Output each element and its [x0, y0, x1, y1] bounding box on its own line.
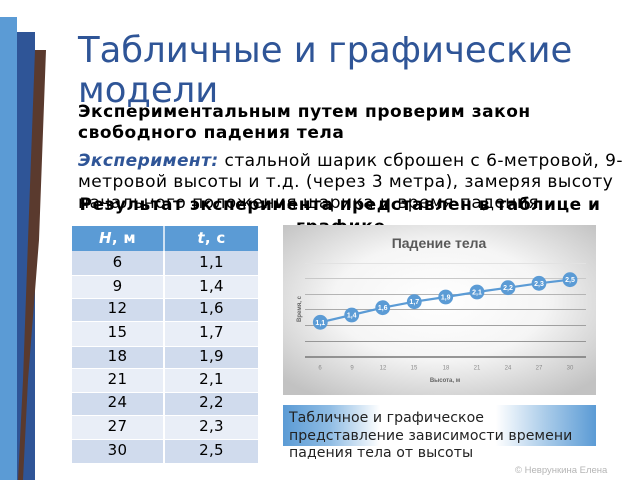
caption text: Табличное и графическое: [289, 410, 484, 426]
line chart: falling body: [283, 225, 596, 395]
title: Табличные и графические: [78, 30, 572, 71]
x axis labels: [318, 366, 574, 372]
data labels: 1,6: [378, 305, 388, 312]
table header: H, t: H, м: [99, 229, 136, 247]
table rows: 1,9: [199, 347, 224, 365]
data labels: 2,1: [472, 290, 482, 296]
x axis labels: 18: [443, 366, 450, 372]
table rows: 1,6: [199, 299, 224, 317]
table rows: 1,4: [199, 277, 224, 295]
caption text: представление зависимости времени: [289, 428, 572, 444]
intro text: свободного падения тела: [78, 123, 344, 143]
caption text: [288, 410, 572, 461]
table rows: 2,1: [199, 370, 224, 388]
caption: [283, 405, 596, 461]
grid lines: [305, 264, 586, 357]
caption text: падения тела от высоты: [289, 445, 473, 461]
data labels: 1,7: [409, 299, 419, 306]
x axis title: Высота, м: [430, 378, 461, 384]
table rows: 6: [113, 253, 122, 271]
experiment description: [78, 151, 623, 213]
x axis labels: 21: [474, 366, 481, 372]
x axis labels: 24: [505, 366, 512, 372]
intro text: [78, 102, 531, 143]
table rows: 15: [108, 323, 127, 341]
x axis labels: 6: [318, 366, 322, 372]
result heading: [80, 195, 600, 237]
data points: [313, 272, 577, 330]
intro text: Экспериментальным путем проверим закон: [78, 102, 531, 122]
data labels: 2,2: [503, 285, 513, 292]
table rows: 2,3: [199, 417, 224, 435]
decorative side stripes: [0, 17, 46, 480]
x axis labels: 27: [536, 366, 543, 372]
table rows: 2,5: [199, 441, 224, 459]
table header: H, t: t, с: [197, 229, 226, 247]
title: модели: [78, 70, 218, 111]
table rows: 27: [108, 417, 127, 435]
table rows: 21: [108, 370, 127, 388]
table header: H, t: [72, 226, 258, 251]
table rows: 1,7: [199, 323, 224, 341]
data labels: [315, 277, 575, 327]
table rows: 9: [113, 277, 122, 295]
experiment description: Эксперимент: стальной шарик сброшен с 6-метровой, 9-: [78, 151, 623, 171]
watermark: © Неврункина Елена: [515, 465, 607, 476]
chart title: Падение тела: [392, 235, 486, 251]
result heading: графике: [296, 217, 386, 237]
result heading: Результат эксперимента представлен в таблице и: [80, 195, 600, 215]
table rows: 1,1: [199, 253, 224, 271]
table rows: 2,2: [199, 393, 224, 411]
x axis labels: 30: [567, 366, 574, 372]
table rows: [72, 251, 258, 463]
table rows: 18: [108, 347, 127, 365]
table rows: 24: [108, 393, 127, 411]
experiment description: начального положения шарика и время падения: [78, 193, 539, 213]
data labels: 2,5: [565, 277, 575, 284]
data labels: 1,1: [315, 320, 325, 327]
caption gradient box: [283, 405, 596, 446]
table rows: 30: [108, 441, 127, 459]
data table: [72, 226, 258, 463]
x axis labels: 12: [380, 366, 387, 372]
data line: [320, 280, 570, 322]
experiment description: метровой высоты и т.д. (через 3 метра), замеряя высоту: [78, 172, 613, 192]
data labels: 1,4: [347, 312, 357, 320]
data labels: 1,9: [441, 294, 451, 302]
y axis title: Время, с: [297, 295, 303, 322]
title: [78, 30, 572, 111]
data labels: 2,3: [534, 281, 544, 288]
x axis labels: 15: [411, 366, 418, 372]
table rows: 12: [108, 299, 127, 317]
x axis labels: 9: [350, 366, 354, 372]
